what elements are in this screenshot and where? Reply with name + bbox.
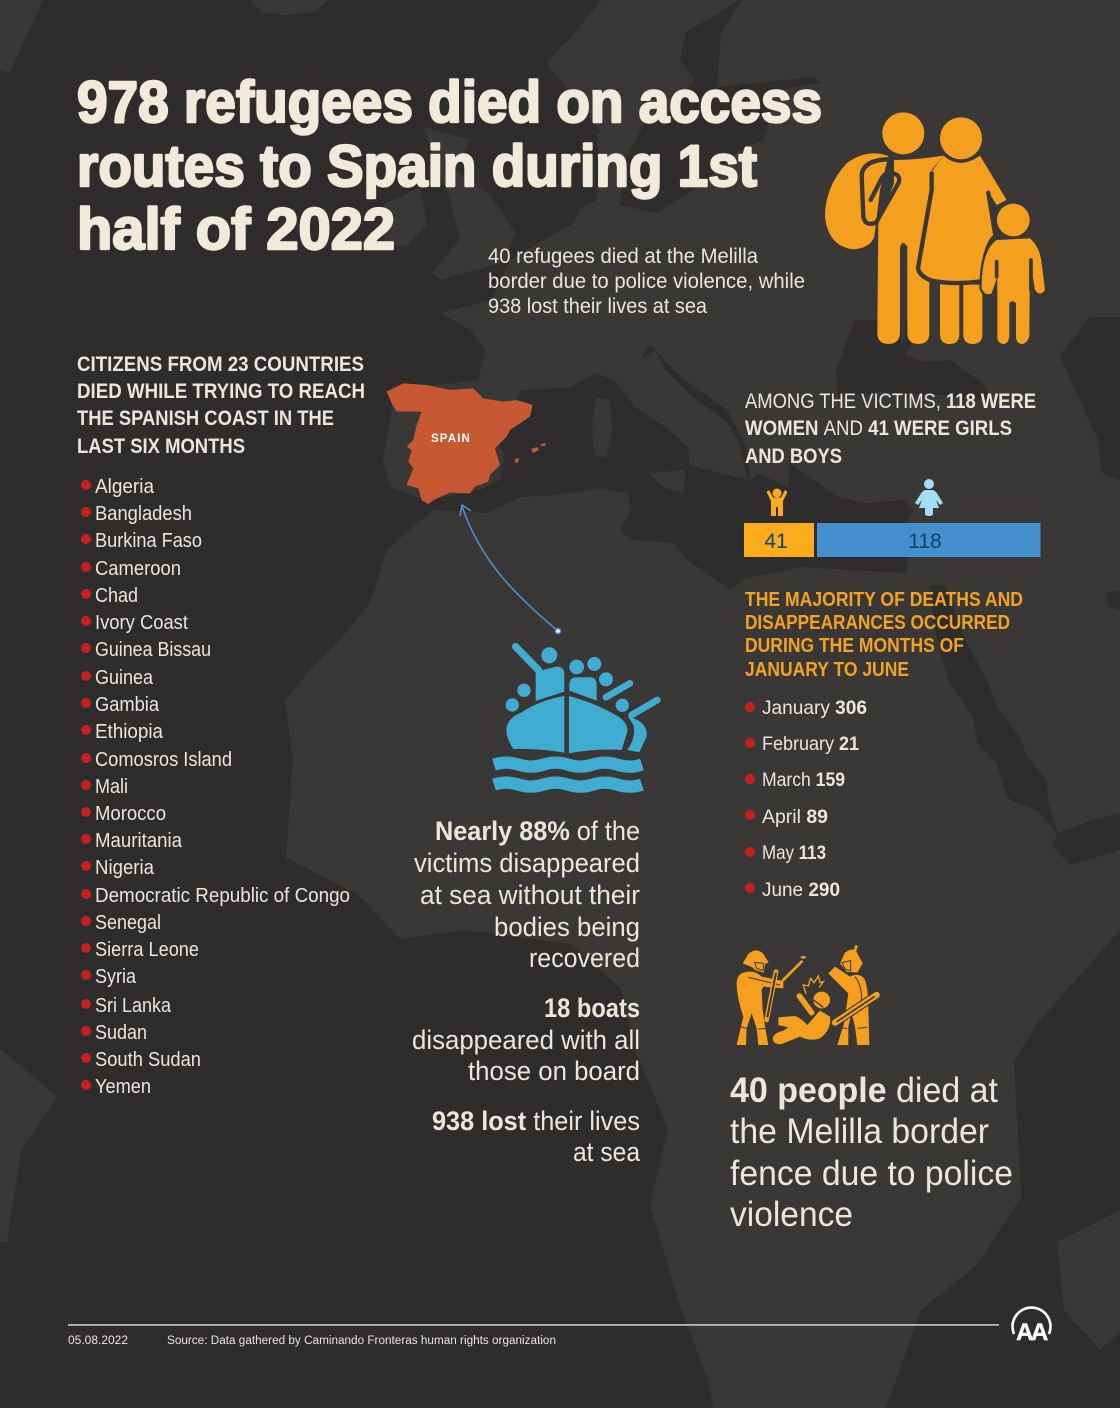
title: 978 refugees died on access: [77, 70, 822, 135]
heading: months: [745, 589, 1023, 681]
icon: child: [766, 488, 788, 516]
text block: Melilla fence: fence due to police: [730, 1154, 1013, 1193]
text block: Melilla fence: the Melilla border: [730, 1112, 989, 1151]
list: 23 countries: Democratic Republic of Congo: [95, 885, 350, 907]
icon: woman: [915, 479, 943, 516]
list: 23 countries: Comosros Island: [95, 749, 232, 771]
list: 23 countries: Yemen: [95, 1076, 151, 1098]
subtitle: 40 refugees died at the Melilla: [488, 245, 758, 268]
footer: date and source: Source: Data gathered by Caminando Fronteras human rights organization: [167, 1335, 556, 1347]
bar chart: 41 children vs 118 women: 118: [908, 530, 942, 553]
text block: sea statistics: at sea without their: [420, 880, 640, 910]
bar chart: 41 children vs 118 women: [744, 523, 1040, 557]
text block: sea statistics: 938 lost their lives: [432, 1106, 640, 1136]
list: 23 countries: Mauritania: [95, 830, 183, 852]
map: Spain: [387, 383, 546, 504]
list: 23 countries: Chad: [95, 585, 138, 607]
map: Spain: SPAIN: [431, 433, 471, 445]
list: 23 countries: Cameroon: [95, 558, 181, 580]
heading: countries: THE SPANISH COAST IN THE: [77, 407, 334, 430]
text block: Melilla fence: 40 people died at: [730, 1071, 998, 1110]
text block: Melilla fence: violence: [730, 1195, 853, 1234]
list: 23 countries: Sierra Leone: [95, 939, 199, 961]
list: 23 countries: Burkina Faso: [95, 530, 202, 552]
text block: sea statistics: Nearly 88% of the: [435, 816, 640, 846]
text block: sea statistics: bodies being: [494, 912, 640, 942]
icon: police violence: [737, 945, 877, 1045]
heading: months: DISAPPEARANCES OCCURRED: [745, 612, 1010, 634]
list: 23 countries: Gambia: [95, 694, 160, 716]
text block: sea statistics: at sea: [573, 1137, 641, 1167]
title: half of 2022: [77, 197, 395, 262]
text block: sea statistics: disappeared with all: [412, 1025, 640, 1055]
list: deaths by month: March 159: [762, 769, 845, 791]
heading: months: JANUARY TO JUNE: [745, 659, 909, 681]
list: 23 countries: Algeria: [95, 476, 155, 498]
heading: months: DURING THE MONTHS OF: [745, 635, 964, 657]
footer: date and source: 05.08.2022: [68, 1335, 128, 1347]
list: 23 countries: Senegal: [95, 912, 161, 934]
list: deaths by month: April 89: [762, 806, 828, 828]
heading: months: THE MAJORITY OF DEATHS AND: [745, 589, 1023, 611]
icon: refugee family: [825, 112, 1045, 344]
title: routes to Spain during 1st: [77, 134, 757, 199]
footer: date and source: [68, 1324, 999, 1347]
subtitle: 938 lost their lives at sea: [488, 295, 707, 318]
heading: countries: LAST SIX MONTHS: [77, 435, 245, 458]
logo: Anadolu Agency: AA: [1016, 1319, 1048, 1346]
list: deaths by month: January 306: [762, 697, 867, 719]
list: deaths by month: [745, 697, 867, 901]
text block: sea statistics: victims disappeared: [414, 848, 640, 878]
list: 23 countries: Guinea Bissau: [95, 639, 211, 661]
bar chart: 41 children vs 118 women: 41: [764, 530, 788, 553]
icon: migrant boat: [494, 647, 657, 787]
text block: Melilla fence: [730, 1071, 1013, 1234]
list: 23 countries: South Sudan: [95, 1049, 201, 1071]
title: [77, 70, 822, 262]
heading: women and children victims: WOMEN AND 41 WERE GIRLS: [745, 417, 1012, 440]
heading: women and children victims: AMONG THE VICTIMS, 118 WERE: [745, 390, 1036, 413]
list: 23 countries: Syria: [95, 966, 137, 988]
list: 23 countries: Sudan: [95, 1022, 147, 1044]
list: 23 countries: Bangladesh: [95, 503, 192, 525]
list: deaths by month: February 21: [762, 733, 859, 755]
list: deaths by month: June 290: [762, 879, 840, 901]
list: 23 countries: Ivory Coast: [95, 612, 188, 634]
list: 23 countries: Guinea: [95, 667, 154, 689]
list: 23 countries: [81, 476, 350, 1098]
text block: sea statistics: 18 boats: [544, 993, 640, 1023]
subtitle: [488, 245, 805, 318]
list: 23 countries: Sri Lanka: [95, 995, 172, 1017]
heading: countries: CITIZENS FROM 23 COUNTRIES: [77, 353, 364, 376]
logo: Anadolu Agency: [1012, 1308, 1050, 1346]
arrow: boat route to Spain: [460, 505, 561, 634]
subtitle: border due to police violence, while: [488, 270, 805, 293]
heading: women and children victims: [745, 390, 1036, 468]
list: 23 countries: Nigeria: [95, 857, 155, 879]
heading: countries: DIED WHILE TRYING TO REACH: [77, 380, 365, 403]
heading: women and children victims: AND BOYS: [745, 445, 842, 468]
text block: sea statistics: recovered: [529, 943, 640, 973]
text block: sea statistics: [412, 816, 641, 1167]
heading: countries: [77, 353, 365, 458]
list: deaths by month: May 113: [762, 842, 826, 864]
text block: sea statistics: those on board: [468, 1056, 640, 1086]
list: 23 countries: Mali: [95, 776, 128, 798]
list: 23 countries: Ethiopia: [95, 721, 164, 743]
list: 23 countries: Morocco: [95, 803, 166, 825]
